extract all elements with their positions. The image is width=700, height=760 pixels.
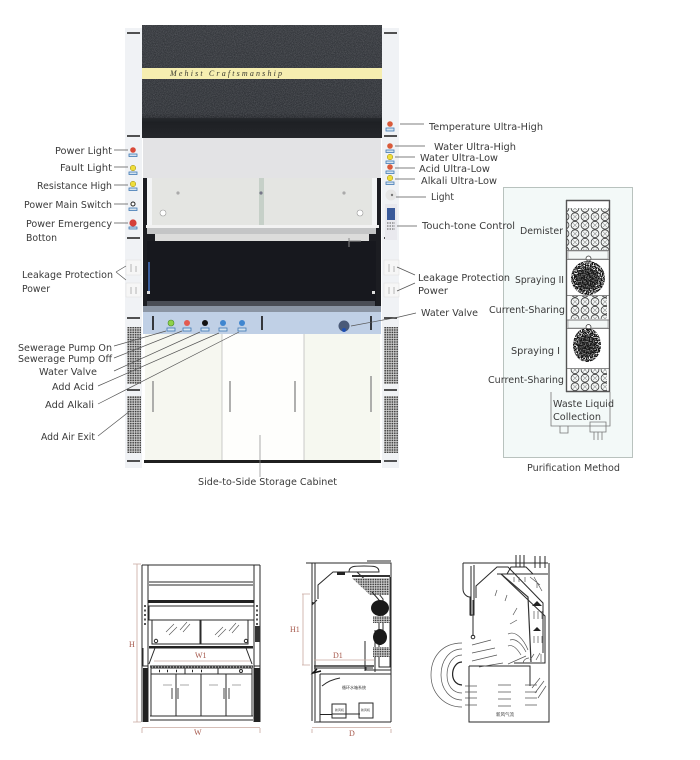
right labels: Alkali Ultra-Low	[421, 176, 497, 187]
technical drawing: airflow: 新风气流	[496, 711, 514, 718]
dimension marks: H1	[290, 625, 300, 634]
dark top panel	[142, 25, 382, 138]
right labels: Water Ultra-Low	[420, 153, 498, 164]
grey sash band	[143, 138, 381, 178]
technical drawing: side section	[290, 561, 391, 738]
indicator: water valve	[202, 320, 208, 326]
storage cabinet doors	[144, 334, 381, 463]
panel: purification method	[488, 188, 632, 458]
right labels: Temperature Ultra-High	[428, 122, 543, 133]
indicator: sewerage pump off	[184, 320, 190, 326]
left labels: Power	[22, 284, 51, 295]
spray nozzles	[532, 601, 542, 631]
left labels: Sewerage Pump On	[18, 343, 112, 354]
left labels: Power Emergency	[26, 219, 112, 230]
spraying I nozzle	[573, 324, 601, 362]
technical drawing: airflow	[431, 555, 549, 722]
left labels: Power Light	[55, 146, 112, 157]
purification caption: Purification Method	[527, 463, 620, 474]
demister packing	[567, 208, 609, 250]
control bar	[143, 306, 381, 334]
right labels: Touch-tone Control	[421, 221, 515, 232]
left labels: Add Alkali	[45, 400, 94, 411]
right labels	[418, 122, 543, 319]
left labels: Botton	[26, 233, 57, 244]
indicator: sewerage pump on	[168, 320, 174, 326]
dimension marks: D1	[333, 651, 343, 660]
right labels: Leakage Protection	[418, 273, 510, 284]
dimension marks: D	[349, 729, 355, 738]
left side column	[125, 28, 142, 468]
right status lights	[386, 121, 394, 184]
current-sharing packing lower	[570, 369, 607, 391]
tower labels: Demister	[520, 226, 564, 237]
leader lines	[98, 124, 426, 477]
light switch	[386, 190, 396, 200]
left labels: Water Valve	[39, 367, 97, 378]
right labels: Water Valve	[421, 308, 478, 319]
water valve knob	[338, 320, 350, 332]
technical drawing: side section: 循环水箱系统	[342, 684, 366, 691]
left labels: Fault Light	[60, 163, 112, 174]
dimension marks: W1	[195, 651, 207, 660]
touch-tone control panel	[385, 204, 397, 240]
tower labels: Current-Sharing	[489, 305, 565, 316]
right labels: Power	[418, 286, 449, 297]
side spray blobs	[371, 600, 389, 645]
yellow brand strip: Mehist Craftsmanship	[169, 69, 282, 78]
left labels: Power Main Switch	[24, 200, 112, 211]
spraying II nozzle	[571, 256, 605, 295]
dimension marks: H	[129, 640, 135, 649]
right labels: Light	[431, 192, 454, 203]
left labels: Add Air Exit	[41, 432, 95, 443]
right labels: Acid Ultra-Low	[419, 164, 490, 175]
dimension marks	[129, 564, 260, 737]
leakage protection sockets right	[384, 260, 399, 297]
left labels	[18, 146, 113, 443]
dimension marks: W	[194, 728, 202, 737]
left status lights	[129, 147, 137, 229]
curved airflow	[431, 633, 546, 707]
leakage protection sockets left	[126, 260, 141, 297]
right labels: Water Ultra-High	[434, 142, 516, 153]
tower labels: Spraying II	[515, 275, 564, 286]
technical drawing: side section: 新风机	[361, 707, 370, 712]
tower labels: Current-Sharing	[488, 375, 564, 386]
tower labels	[488, 226, 614, 423]
left ventilation grilles	[127, 327, 141, 453]
current-sharing packing upper	[570, 296, 607, 319]
tower labels: Collection	[553, 412, 601, 423]
left labels: Sewerage Pump Off	[18, 354, 113, 365]
right ventilation grilles	[384, 327, 398, 453]
indicator: add acid	[220, 320, 226, 326]
left labels: Add Acid	[52, 382, 94, 393]
technical drawing: front view	[129, 564, 260, 737]
indicator: add alkali	[239, 320, 245, 326]
waste liquid tray	[551, 392, 610, 440]
tower labels: Waste Liquid	[553, 399, 614, 410]
yellow brand strip	[142, 68, 382, 79]
cabinet caption: Side-to-Side Storage Cabinet	[198, 477, 337, 488]
exhaust arrows	[516, 555, 545, 568]
technical drawing: side section: 新风机	[335, 707, 344, 712]
tower labels: Spraying I	[511, 346, 560, 357]
left labels: Resistance High	[37, 181, 112, 192]
left labels: Leakage Protection	[22, 270, 113, 281]
fume hood front view	[125, 25, 399, 468]
hood chamber	[143, 178, 381, 310]
purification tower	[551, 200, 610, 440]
dimension marks	[290, 594, 391, 738]
right side column	[382, 28, 399, 468]
